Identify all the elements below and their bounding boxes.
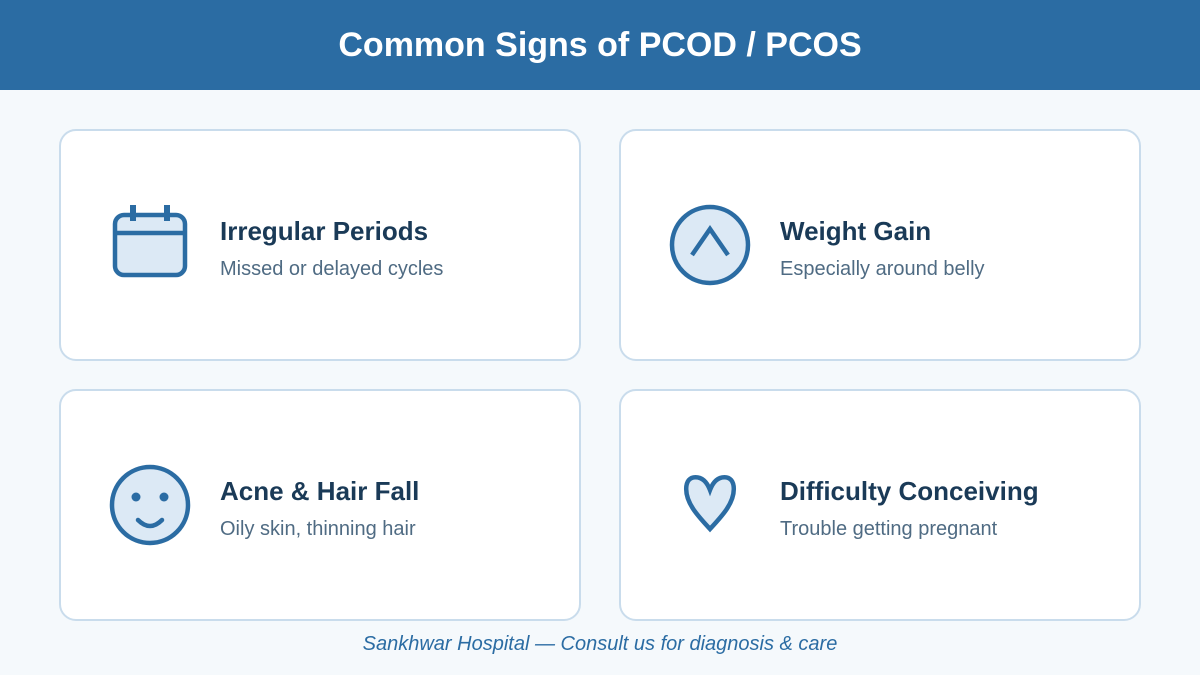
panel: difficulty conceiving [620, 390, 1140, 620]
icon: heart [686, 477, 734, 529]
text: weight gain description: Especially around belly [780, 258, 985, 280]
icon: smiling face [112, 467, 188, 543]
icon: calendar [115, 205, 185, 275]
heading: weight gain: Weight Gain [780, 216, 931, 246]
panel: acne and hair fall [60, 390, 580, 620]
heading: acne and hair fall: Acne & Hair Fall [220, 476, 419, 506]
header banner [0, 0, 1200, 90]
title: Common Signs of PCOD / PCOS [338, 26, 862, 64]
text: irregular periods description: Missed or delayed cycles [220, 258, 443, 280]
text: acne and hair fall description: Oily skin, thinning hair [220, 518, 416, 540]
heading: irregular periods: Irregular Periods [220, 216, 428, 246]
heading: difficulty conceiving: Difficulty Conceiving [780, 476, 1039, 506]
panel: irregular periods [60, 130, 580, 360]
panel: weight gain [620, 130, 1140, 360]
footer note: Sankhwar Hospital — Consult us for diagnosis & care [363, 633, 837, 655]
icon: upward chevron in circle [672, 207, 748, 283]
text: difficulty conceiving description: Trouble getting pregnant [780, 518, 998, 540]
